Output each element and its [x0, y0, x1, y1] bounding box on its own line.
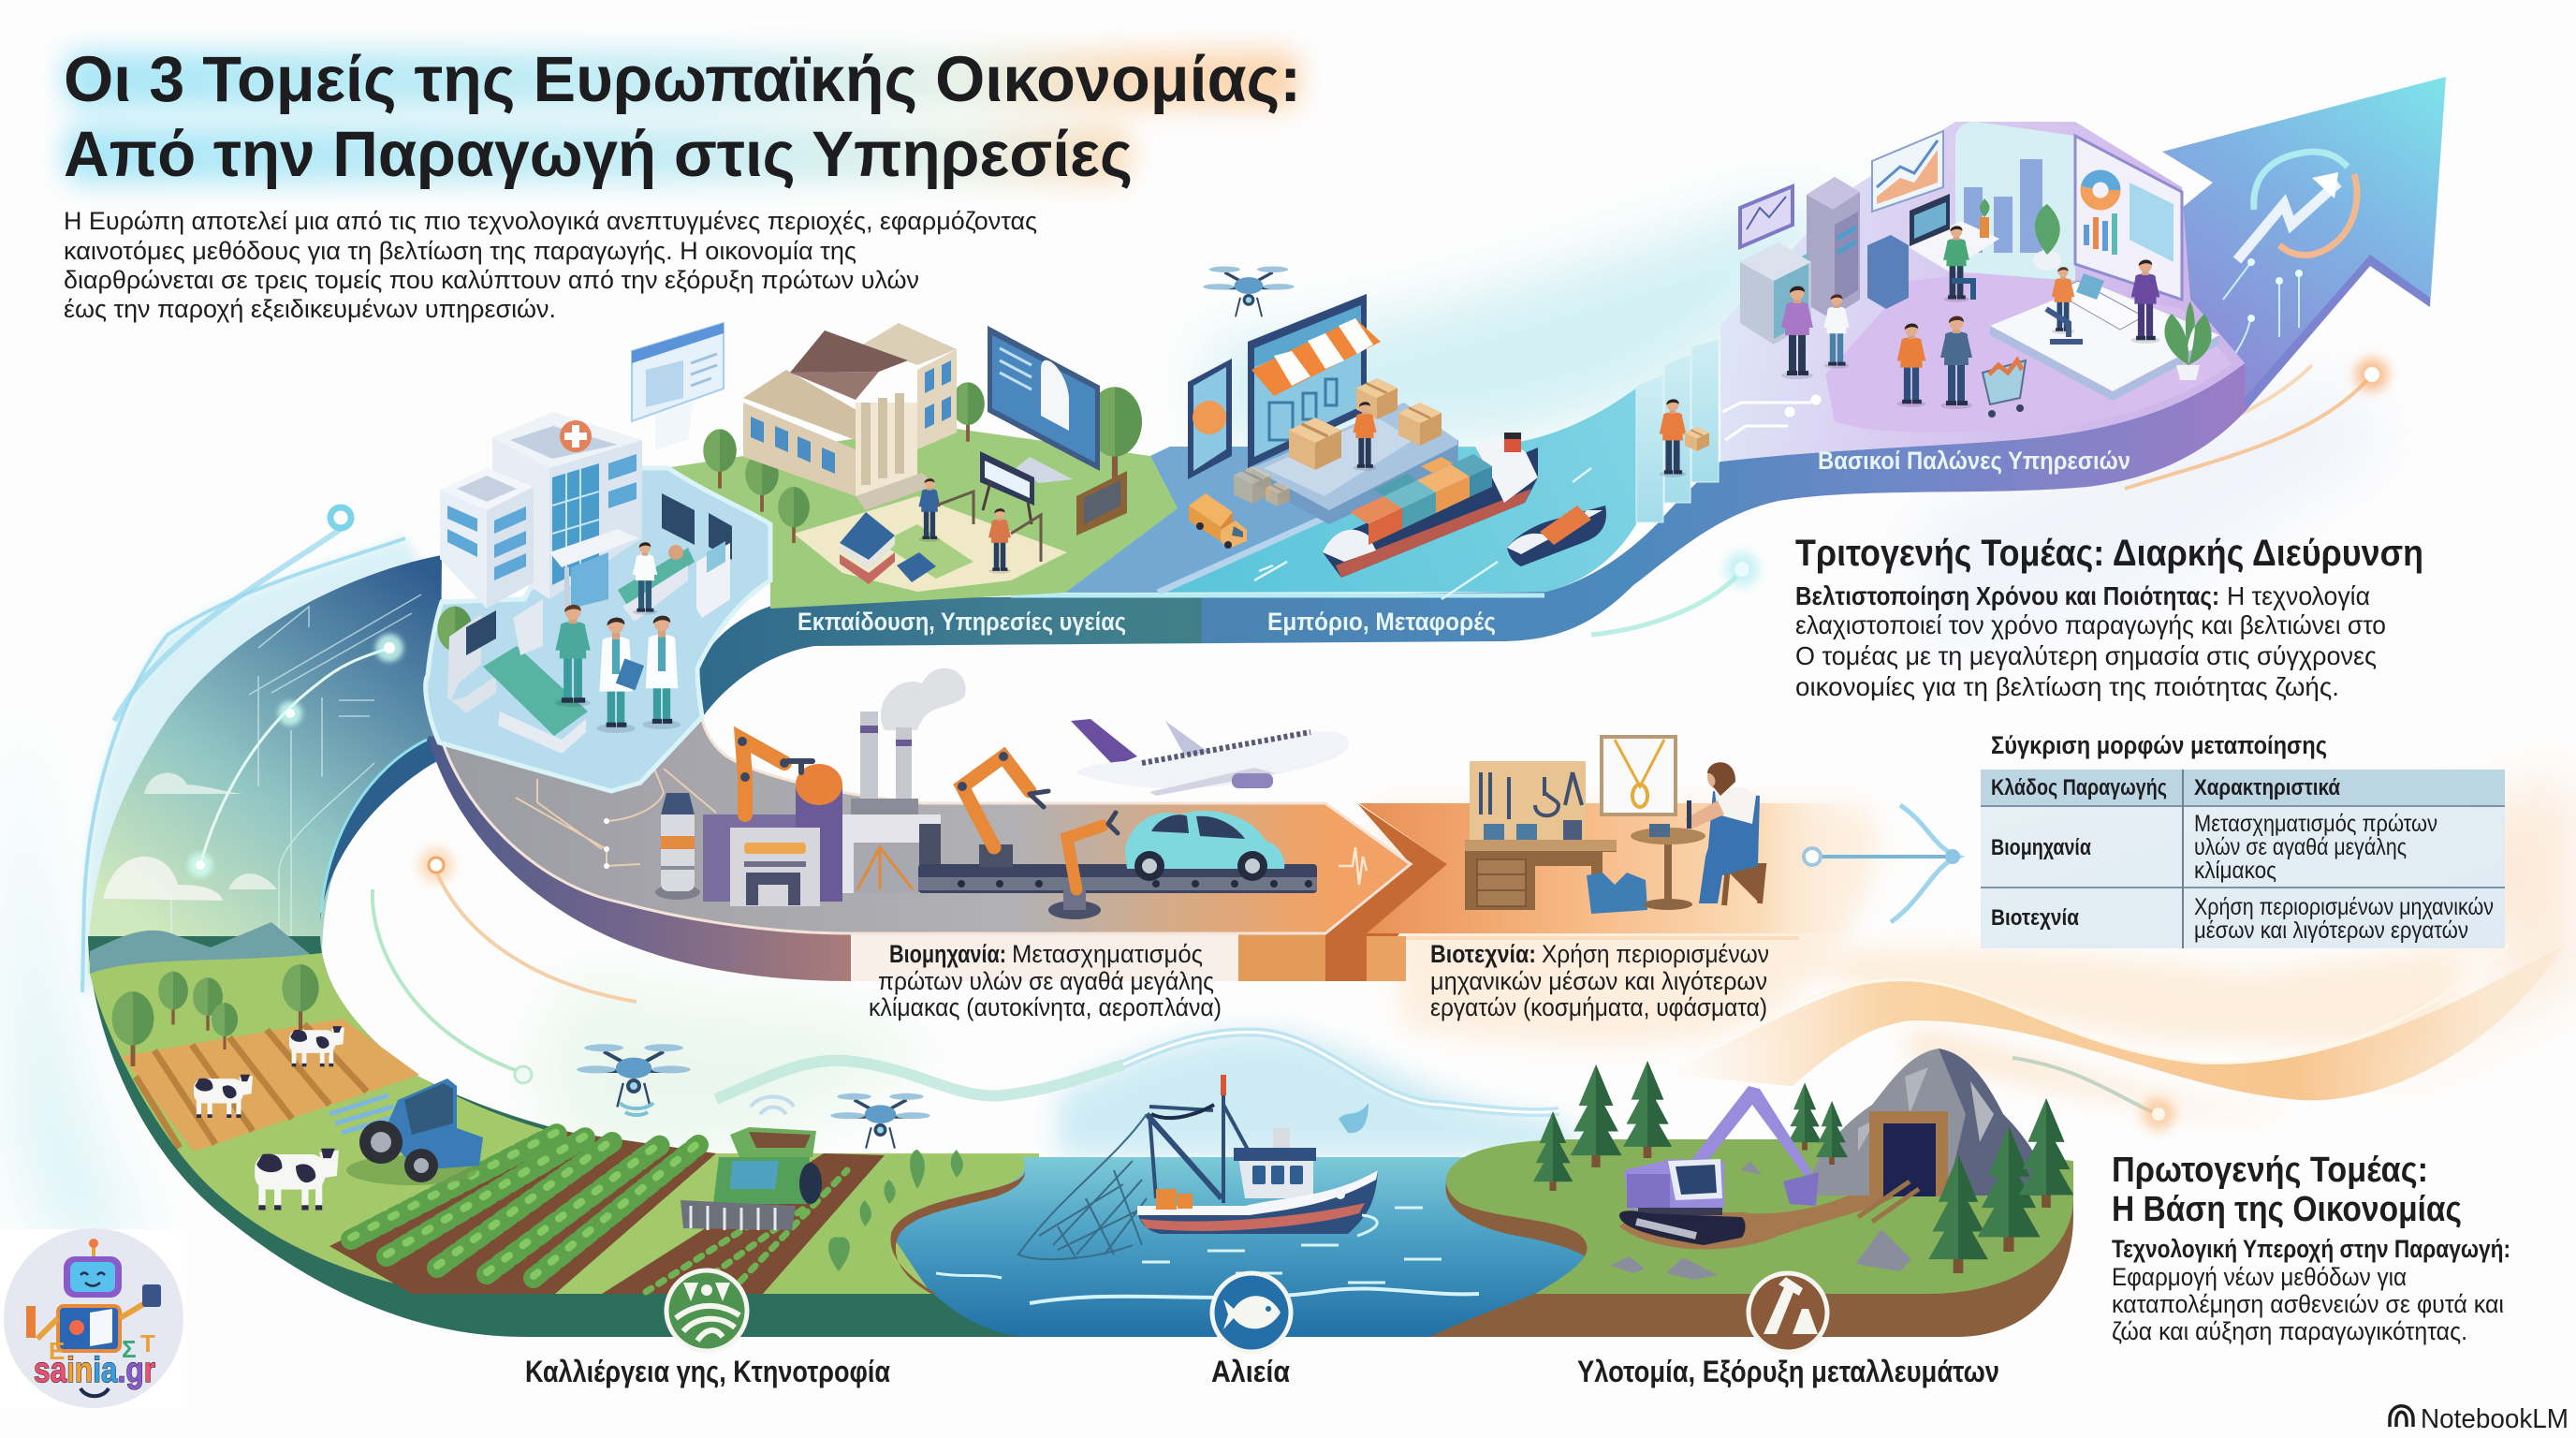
label: forestry and mining: Υλοτομία, Εξόρυξη μεταλλευμάτων	[1577, 1355, 1999, 1388]
standing manager	[2131, 259, 2159, 344]
manufacturing band: crafts surface	[1359, 803, 1863, 981]
tree group	[703, 382, 1142, 543]
text block: industry: πρώτων υλών σε αγαθά μεγάλης	[878, 967, 1214, 995]
purple building	[703, 764, 842, 906]
logo: sainia.gr: Ε	[49, 1337, 65, 1365]
large education screen	[988, 326, 1100, 483]
fishing net	[1018, 1114, 1147, 1259]
text block: primary sector: Τεχνολογική Υπεροχή στην Παραγωγή:	[2112, 1235, 2510, 1263]
nurse and doctors	[555, 605, 681, 733]
airplane	[1071, 719, 1349, 796]
floor circuit accents	[1722, 396, 1820, 440]
label: fishing: Αλιεία	[1211, 1355, 1290, 1388]
desk with worker	[1909, 194, 1999, 302]
comparison table: κλίμακος	[2194, 858, 2276, 884]
patient bed	[618, 542, 695, 622]
comparison table: Χρήση περιορισμένων μηχανικών	[2194, 894, 2494, 920]
text block: tertiary sector: Βελτιστοποίηση Χρόνου και Ποιότητας:	[1795, 581, 2219, 610]
intro paragraph: έως την παροχή εξειδικευμένων υπηρεσιών.	[64, 295, 556, 323]
white meeting platform	[1990, 273, 2219, 401]
band label: trade and transport: Εμπόριο, Μεταφορές	[1267, 608, 1496, 636]
parcels	[1234, 378, 1442, 506]
online store screen	[1248, 294, 1367, 468]
manufacturing band: side wall	[428, 736, 1447, 981]
text block: tertiary sector: ελαχιστοποιεί τον χρόνο παραγωγής και βελτιώνει στο	[1795, 610, 2386, 639]
gas cylinder	[655, 793, 700, 900]
visitors and shoppers	[1781, 286, 1972, 409]
orange wave ribbon	[1659, 946, 2565, 1100]
large potted plant	[2164, 301, 2212, 380]
second crop field	[602, 1153, 885, 1294]
students at desks	[918, 478, 1041, 574]
intro paragraph: καινοτόμες μεθόδους για τη βελτίωση της παραγωγής. Η οικονομία της	[64, 237, 856, 265]
garment	[1587, 873, 1647, 914]
shopping cart	[1983, 360, 2026, 418]
manufacturing band: industry surface	[439, 712, 1411, 933]
main ribbon band	[697, 363, 2245, 715]
crop field soil	[329, 1131, 716, 1294]
fishing boat	[936, 1075, 1479, 1303]
scenery: mountains and hills	[90, 922, 1039, 1294]
icon: growth arrow circle	[2237, 152, 2357, 260]
small cargo boat	[1507, 506, 1606, 566]
text block: industry: Βιομηχανία:	[889, 940, 1006, 968]
text block: tertiary sector: Η τεχνολογία	[2227, 581, 2370, 610]
bookcase	[1076, 471, 1127, 536]
text block: tertiary sector: Τριτογενής Τομέας: Διαρκής Διεύρυνση	[1795, 533, 2423, 574]
band label: service pillars: Βασικοί Παλώνες Υπηρεσιών	[1818, 447, 2130, 475]
back wall	[1955, 122, 2075, 281]
seated worker	[2046, 267, 2083, 342]
comparison table: Σύγκριση μορφών μεταποίησης	[1991, 731, 2327, 759]
text block: primary sector	[2112, 1151, 2510, 1345]
left swoosh: transition from primary to tertiary sector	[82, 529, 442, 992]
shore and shoreline plants	[763, 1150, 1025, 1294]
potted plant	[2033, 204, 2061, 271]
warehouse worker	[1353, 402, 1377, 471]
text block: primary sector: ζώα και αύξηση παραγωγικότητας.	[2112, 1317, 2467, 1345]
hospital entrance	[549, 529, 638, 612]
fields	[122, 1019, 885, 1294]
comparison table: Βιοτεχνία	[1991, 905, 2079, 931]
hospital tower	[492, 412, 642, 599]
excavator	[1619, 1086, 1819, 1245]
label: farming: Καλλιέργεια γης, Κτηνοτροφία	[525, 1355, 890, 1388]
title glow	[64, 51, 1299, 183]
floor	[1720, 122, 2245, 462]
dashboard panel with donut chart	[2075, 136, 2182, 300]
mast and rigging	[1147, 1077, 1259, 1203]
floating info card	[632, 323, 724, 449]
tractor	[329, 1078, 483, 1185]
comparison table: υλών σε αγαθά μεγάλης	[2194, 834, 2407, 860]
band label: education and health: Εκπαίδουση, Υπηρεσίες υγείας	[798, 608, 1126, 636]
text block: primary sector: καταπολέμηση ασθενειών σε φυτά και	[2112, 1290, 2504, 1318]
comparison table: Βιομηχανία	[1991, 835, 2091, 860]
text block: tertiary sector	[1795, 533, 2423, 701]
container ship	[1323, 433, 1538, 578]
university building	[743, 323, 957, 510]
text block: crafts: Χρήση περιορισμένων	[1542, 940, 1769, 968]
intro paragraph: διαρθρώνεται σε τρεις τομείς που καλύπτουν από την εξόρυξη πρώτων υλών	[64, 266, 919, 294]
small wall screen	[1740, 186, 1793, 247]
service kiosk	[1867, 235, 1909, 309]
text block: tertiary sector: Ο τομέας με τη μεγαλύτερη σημασία στις σύγχρονες	[1795, 641, 2377, 670]
panel: glass stairs with climbing person	[1636, 339, 1719, 522]
icon: fishing badge	[1212, 1273, 1291, 1352]
intro paragraph	[64, 207, 1037, 323]
robot arm 2	[958, 752, 1048, 867]
panel: services floor and arrow	[1720, 77, 2446, 462]
smartphone	[1188, 359, 1232, 479]
logo: sainia.gr	[0, 1228, 186, 1409]
robot arm 1	[738, 737, 812, 814]
text block: primary sector: Εφαρμογή νέων μεθόδων για	[2112, 1263, 2407, 1291]
farm trees	[112, 964, 319, 1066]
icon: farming badge	[666, 1270, 747, 1351]
data nodes in arrow	[2223, 258, 2303, 365]
connector to comparison table	[1804, 805, 1960, 922]
text block: primary sector: Η Βάση της Οικονομίας	[2112, 1190, 2462, 1229]
panel: trade and transport	[1188, 267, 1606, 578]
title: Οι 3 Τομείς της Ευρωπαϊκής Οικονομίας:	[64, 43, 1301, 115]
logo: sainia.gr: Τ	[140, 1329, 155, 1357]
text block: industry: κλίμακας (αυτοκίνητα, αεροπλάνα)	[869, 993, 1222, 1021]
rocks	[1610, 1161, 1911, 1280]
wall chart	[1872, 131, 1943, 212]
lavender carpet area	[1825, 271, 2232, 433]
vibration mark	[1339, 847, 1367, 885]
primary sector band: farm base	[88, 936, 1039, 1337]
glowing accent lines and nodes	[330, 358, 2389, 1131]
icon: mining badge	[1749, 1273, 1827, 1352]
title: Από την Παραγωγή στις Υπηρεσίες	[64, 118, 1133, 190]
delivery truck	[1189, 493, 1247, 549]
ripples	[936, 1208, 1479, 1303]
monitors	[662, 493, 732, 618]
icon: factory with robot arms, conveyor and car	[655, 668, 1367, 919]
icon: craft workshop	[1465, 737, 1764, 914]
blue-green wave ribbon	[716, 1032, 1591, 1157]
necklace picture	[1602, 737, 1676, 814]
comparison table	[1981, 731, 2505, 948]
comparison table: Μετασχηματισμός πρώτων	[2194, 811, 2437, 837]
smoke	[881, 668, 966, 730]
text block: crafts: εργατών (κοσμήματα, υφάσματα)	[1430, 993, 1767, 1021]
chimneys	[851, 712, 918, 823]
pegboard	[1470, 761, 1586, 848]
car	[1125, 811, 1284, 881]
logo: sainia.gr: sainia.gr	[34, 1351, 155, 1390]
NotebookLM mark: NotebookLM	[2421, 1404, 2569, 1434]
comparison table: Χαρακτηριστικά	[2194, 775, 2340, 800]
river and trade base	[1011, 387, 1638, 599]
craftsman	[1649, 762, 1760, 903]
treatment equipment	[447, 599, 588, 754]
forest	[1533, 1061, 2073, 1273]
circuit traces on industry floor	[516, 769, 716, 869]
logo: sainia.gr: Σ	[122, 1335, 137, 1363]
text block: industry	[869, 940, 1222, 1021]
text block: crafts: Βιοτεχνία:	[1430, 940, 1536, 968]
drones over the farm	[577, 1044, 930, 1149]
drone	[1203, 267, 1295, 316]
cabin	[1273, 1128, 1290, 1152]
comparison table: Κλάδος Παραγωγής	[1991, 775, 2167, 800]
harvester	[681, 1127, 822, 1230]
soft background washes	[9, 206, 2576, 1245]
mountain with mine entrance	[1809, 1049, 2050, 1222]
health panel	[426, 323, 770, 791]
small easel screen	[980, 451, 1034, 524]
title	[64, 43, 1301, 190]
intro paragraph: Η Ευρώπη αποτελεί μια από τις πιο τεχνολογικά ανεπτυγμένες περιοχές, εφαρμόζοντας	[64, 207, 1037, 235]
ploughed field	[122, 1019, 419, 1152]
text block: industry: Μετασχηματισμός	[1012, 940, 1203, 968]
cows	[194, 1026, 344, 1211]
comparison table: μέσων και λιγότερων εργατών	[2194, 917, 2468, 944]
stacks of books	[840, 512, 936, 584]
text block: crafts	[1430, 940, 1769, 1021]
desk	[1465, 840, 1617, 910]
text block: crafts: μηχανικών μέσων και λιγότερων	[1430, 967, 1767, 995]
robot arm 3	[1048, 813, 1118, 919]
e-commerce platform	[1251, 403, 1457, 524]
tree by hospital	[437, 607, 473, 668]
server towers	[1740, 177, 1860, 345]
hull	[1137, 1170, 1378, 1234]
birds and fish	[1339, 1103, 1368, 1133]
education panel	[666, 323, 1178, 609]
shed	[842, 814, 941, 893]
island: mining and forestry	[1429, 1139, 2073, 1337]
conveyor belt	[918, 864, 1317, 893]
text block: primary sector: Πρωτογενής Τομέας:	[2112, 1151, 2428, 1190]
water	[880, 1157, 1619, 1337]
arrow	[2162, 77, 2446, 412]
stool and round table	[1631, 828, 1764, 910]
store awning	[1251, 318, 1381, 396]
text block: tertiary sector: οικονομίες για τη βελτίωση της ποιότητας ζωής.	[1795, 672, 2339, 701]
circuit lines and clouds on the swoosh	[103, 594, 421, 1002]
hospital wing	[440, 468, 534, 609]
